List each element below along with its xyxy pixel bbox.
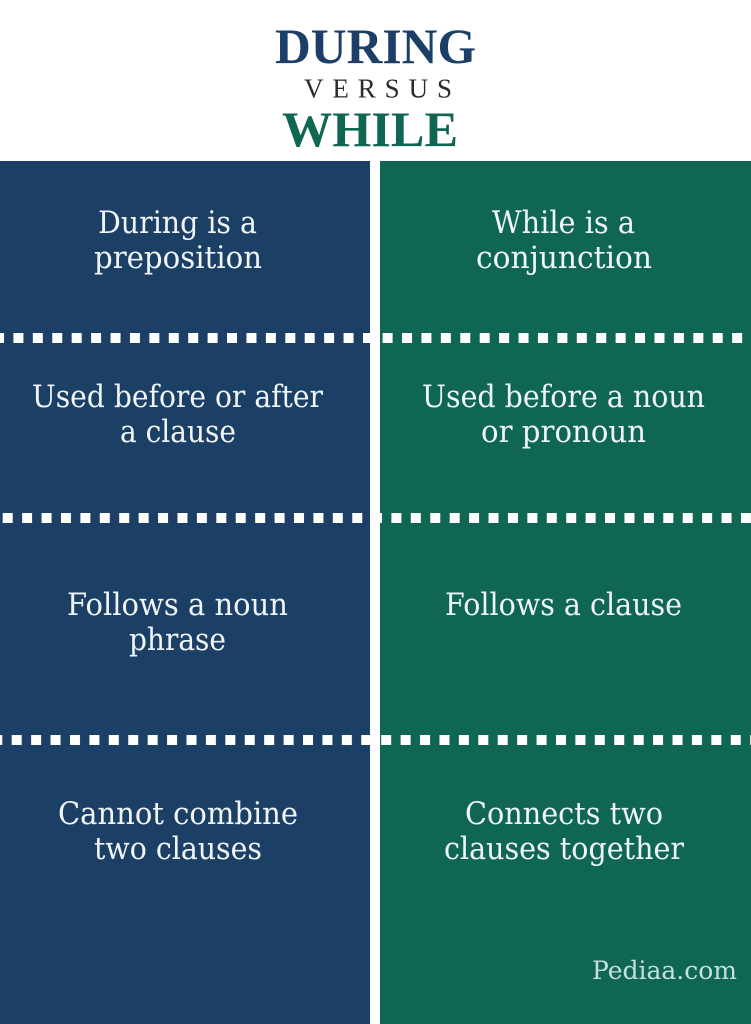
title: versus: VERSUS xyxy=(304,74,452,104)
row 4 text xyxy=(58,796,298,867)
row 3 text: Follows a clause xyxy=(445,587,682,623)
row 2 text: Used before a noun xyxy=(422,379,705,415)
row 3 text: phrase xyxy=(129,622,226,658)
logo: Pediaa.com: Pediaa.com xyxy=(592,956,737,985)
row 3 text: Follows a noun xyxy=(67,587,288,623)
row 4 text: Cannot combine xyxy=(58,796,298,832)
row 2 text xyxy=(32,379,323,450)
row 4 text: Connects two xyxy=(465,796,663,832)
row 2 text: Used before or after xyxy=(32,379,323,415)
row 1 text xyxy=(476,205,652,276)
row 4 text: two clauses xyxy=(94,831,262,867)
panel: During xyxy=(0,161,370,1024)
title xyxy=(275,18,476,157)
panel: While xyxy=(380,161,751,1024)
row 1 text: preposition xyxy=(94,240,262,276)
row 4 text: clauses together xyxy=(444,831,684,867)
title: During: DURING xyxy=(275,18,476,74)
row 1 text: conjunction xyxy=(476,240,652,276)
row 4 text xyxy=(444,796,684,867)
row 1 text xyxy=(94,205,262,276)
row 2 text: a clause xyxy=(120,414,236,450)
row 3 text xyxy=(67,587,288,658)
row 2 text xyxy=(422,379,705,450)
row 1 text: During is a xyxy=(98,205,257,241)
title: While: WHILE xyxy=(282,101,458,157)
row 2 text: or pronoun xyxy=(481,414,646,450)
row 1 text: While is a xyxy=(492,205,635,241)
